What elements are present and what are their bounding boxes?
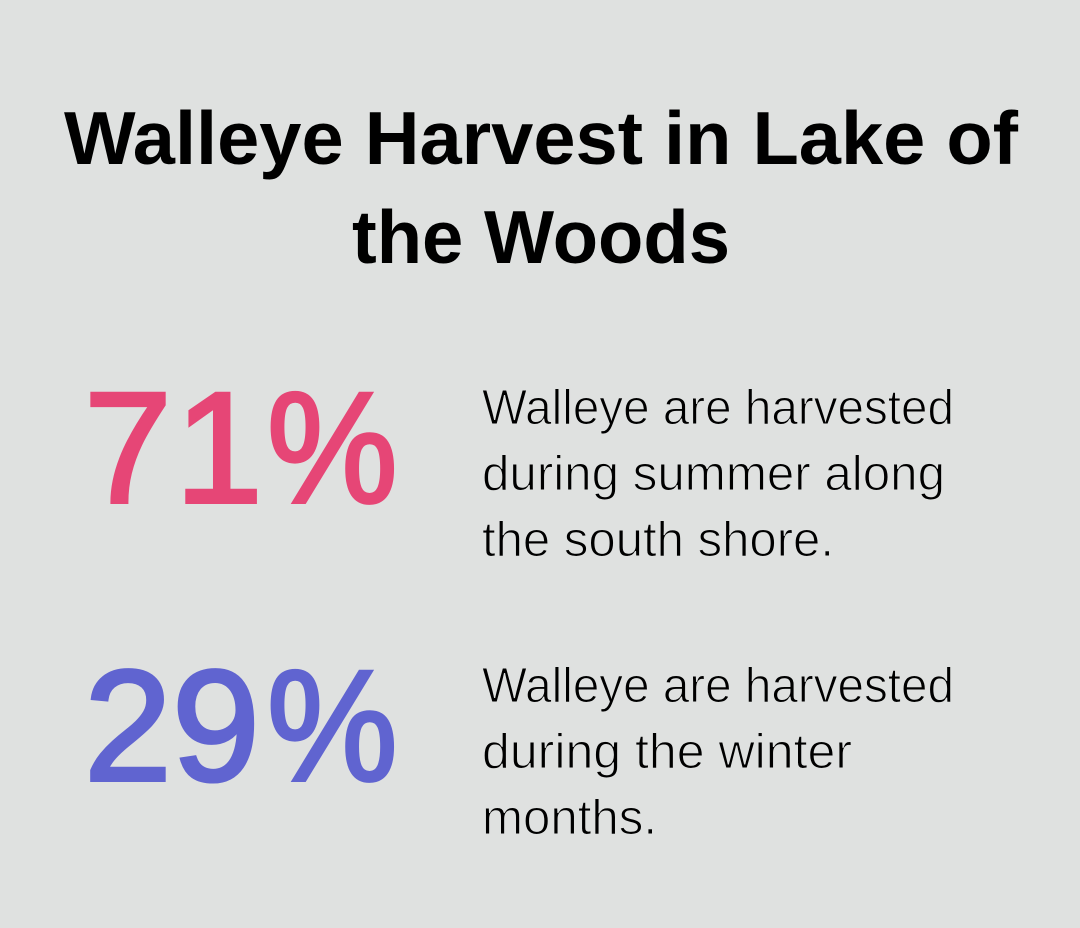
stat: 71%: %	[267, 360, 398, 536]
stat: 29%	[84, 638, 398, 814]
title	[64, 96, 1019, 279]
stat: 29%: %	[267, 638, 398, 814]
description: summer harvest: during summer along	[482, 447, 945, 501]
title: Walleye Harvest in Lake of	[64, 96, 1019, 180]
title: the Woods	[352, 195, 730, 279]
stat: 71%	[84, 360, 398, 536]
description: summer harvest	[482, 381, 954, 567]
description: winter harvest: Walleye are harvested	[482, 659, 954, 713]
description: summer harvest: the south shore.	[482, 513, 834, 567]
description: winter harvest	[482, 659, 954, 845]
stat: 71%: 71	[84, 360, 263, 536]
stat: 29%: 29	[84, 638, 260, 814]
description: winter harvest: during the winter	[482, 725, 852, 779]
description: winter harvest: months.	[482, 791, 657, 845]
description: summer harvest: Walleye are harvested	[482, 381, 954, 435]
